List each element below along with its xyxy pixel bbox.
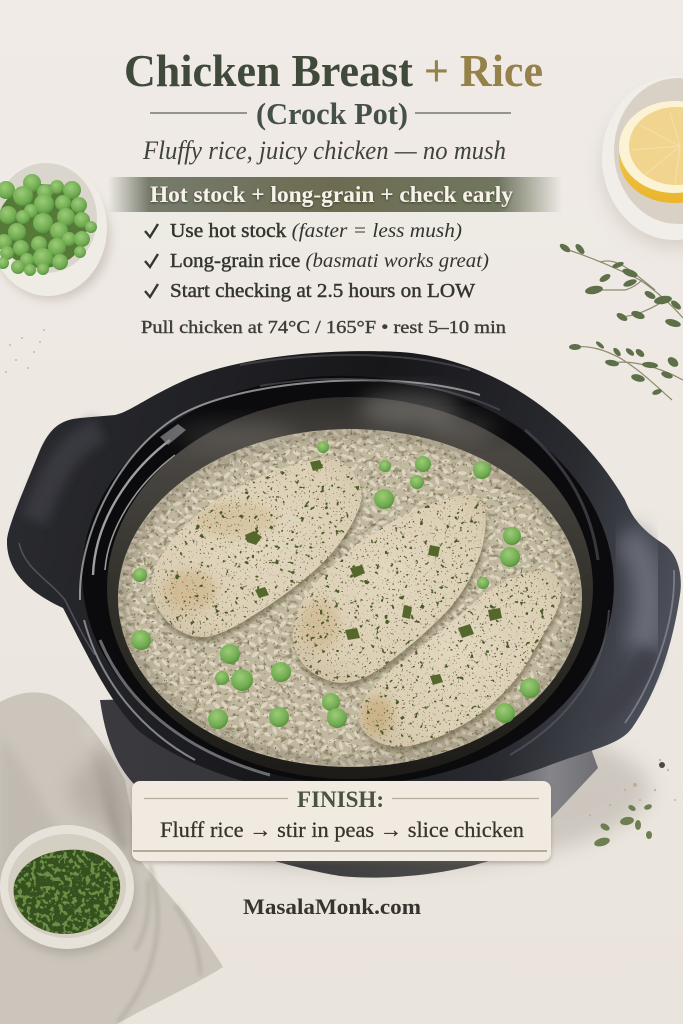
rice shading and flecks: [118, 429, 582, 767]
loose herb leaves: [593, 762, 665, 848]
pot outer rim with handles: [7, 351, 681, 797]
lemon slice: [619, 101, 683, 203]
handle highlights: [19, 355, 674, 723]
title: Chicken Breast + Rice: [124, 45, 543, 96]
banner: [108, 177, 562, 212]
check item 1: Use hot stock (faster = less mush): [170, 220, 462, 242]
rim gloss rings: [80, 379, 609, 775]
check item 3: Start checking at 2.5 hours on LOW: [170, 280, 475, 302]
temperature note: Pull chicken at 74°C / 165°F • rest 5–10 min: [141, 317, 506, 337]
bowl with lemon: [602, 76, 683, 246]
finish heading: FINISH:: [297, 787, 384, 812]
peas in rice: [131, 441, 540, 729]
bowl of chopped herbs: [0, 825, 135, 954]
subtitle: crock pot with rules: (Crock Pot): [256, 96, 408, 131]
glass interior: [107, 397, 593, 779]
chicken breast 1: [150, 458, 366, 644]
linen towel: [0, 692, 223, 1024]
spice speckles: [5, 329, 676, 816]
pot shadow: [70, 710, 650, 870]
rice bed: [118, 429, 582, 767]
finish panel: [132, 781, 551, 863]
chicken breast 2: [292, 494, 490, 690]
checklist: [145, 220, 489, 302]
finish steps: Fluff rice → stir in peas → slice chicken: [160, 817, 524, 842]
check item 2: Long-grain rice (basmati works great): [170, 250, 489, 272]
tagline: Fluffy rice, juicy chicken — no mush: [142, 136, 506, 165]
chicken breast 3: [358, 570, 564, 754]
herb clusters on chicken: [245, 460, 502, 685]
bowl of peas: [0, 160, 110, 300]
banner: Hot stock + long-grain + check early: [150, 182, 514, 207]
thyme sprig upper: [558, 242, 683, 328]
thyme sprig lower: [569, 340, 683, 400]
crock pot: [7, 351, 681, 878]
peas: [0, 174, 97, 276]
steam: [175, 390, 495, 449]
inner black rim: [72, 362, 624, 798]
pot base: [100, 690, 598, 878]
website credit: MasalaMonk.com: [243, 894, 421, 919]
chopped herbs: [14, 850, 120, 934]
